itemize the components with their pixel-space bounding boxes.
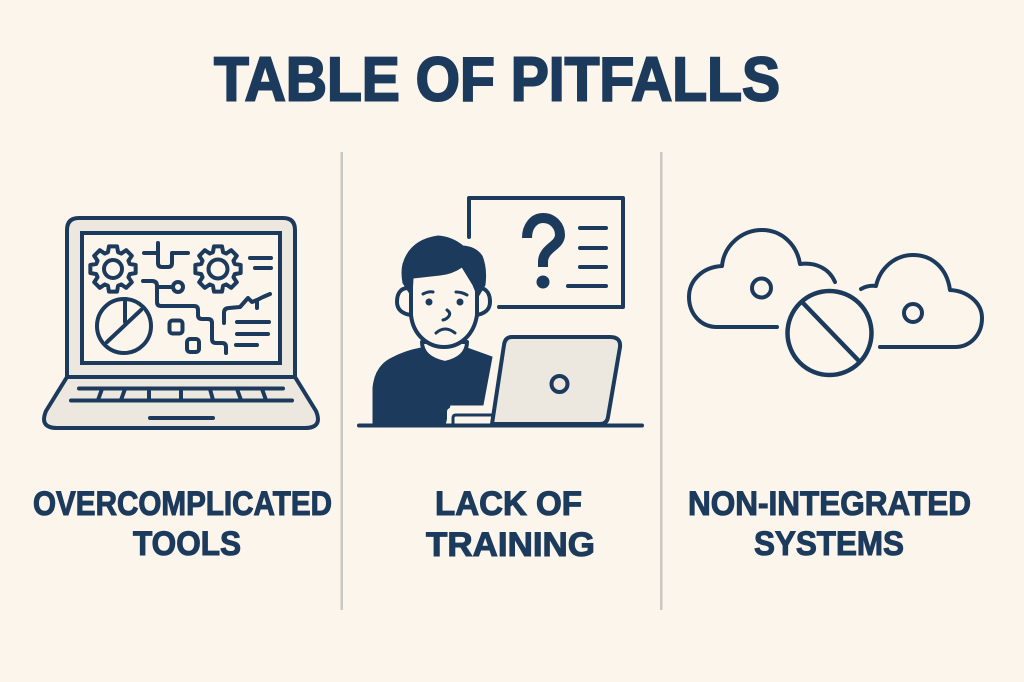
small squares — [170, 320, 199, 352]
text lines and trend line — [224, 258, 271, 345]
label: non-integrated systems: SYSTEMS — [754, 525, 904, 563]
facial features — [423, 292, 467, 333]
label: non-integrated systems — [688, 485, 971, 563]
label: non-integrated systems: NON-INTEGRATED — [688, 485, 971, 523]
circuit lines — [143, 243, 226, 353]
body — [373, 348, 492, 425]
label: lack of training: TRAINING — [426, 526, 595, 564]
icon: disconnected clouds — [689, 230, 982, 375]
gear right — [195, 246, 241, 292]
gear left — [90, 246, 136, 292]
trackpad — [150, 416, 213, 420]
laptop lid — [67, 218, 295, 377]
prohibition sign — [788, 291, 872, 375]
keyboard — [71, 388, 292, 400]
icon: laptop with complex interface — [44, 218, 318, 428]
left cloud — [689, 230, 835, 327]
icon: confused person at laptop — [359, 198, 642, 426]
laptop — [492, 337, 620, 424]
hand — [447, 408, 495, 424]
laptop base — [44, 377, 318, 428]
neck — [422, 342, 467, 363]
hair — [402, 236, 486, 297]
laptop logo — [552, 376, 568, 392]
question panel — [469, 198, 623, 307]
label: overcomplicated tools — [33, 485, 332, 563]
desk line — [359, 424, 642, 428]
label: overcomplicated tools: OVERCOMPLICATED — [33, 485, 332, 523]
pie chart — [97, 299, 151, 353]
label: lack of training — [426, 485, 595, 564]
right cloud — [861, 255, 982, 347]
ears — [397, 288, 490, 315]
laptop screen — [82, 233, 280, 363]
title: TABLE OF PITFALLS — [214, 46, 780, 114]
label: lack of training: LACK OF — [435, 485, 582, 523]
label: overcomplicated tools: TOOLS — [133, 525, 241, 563]
face — [411, 285, 477, 347]
